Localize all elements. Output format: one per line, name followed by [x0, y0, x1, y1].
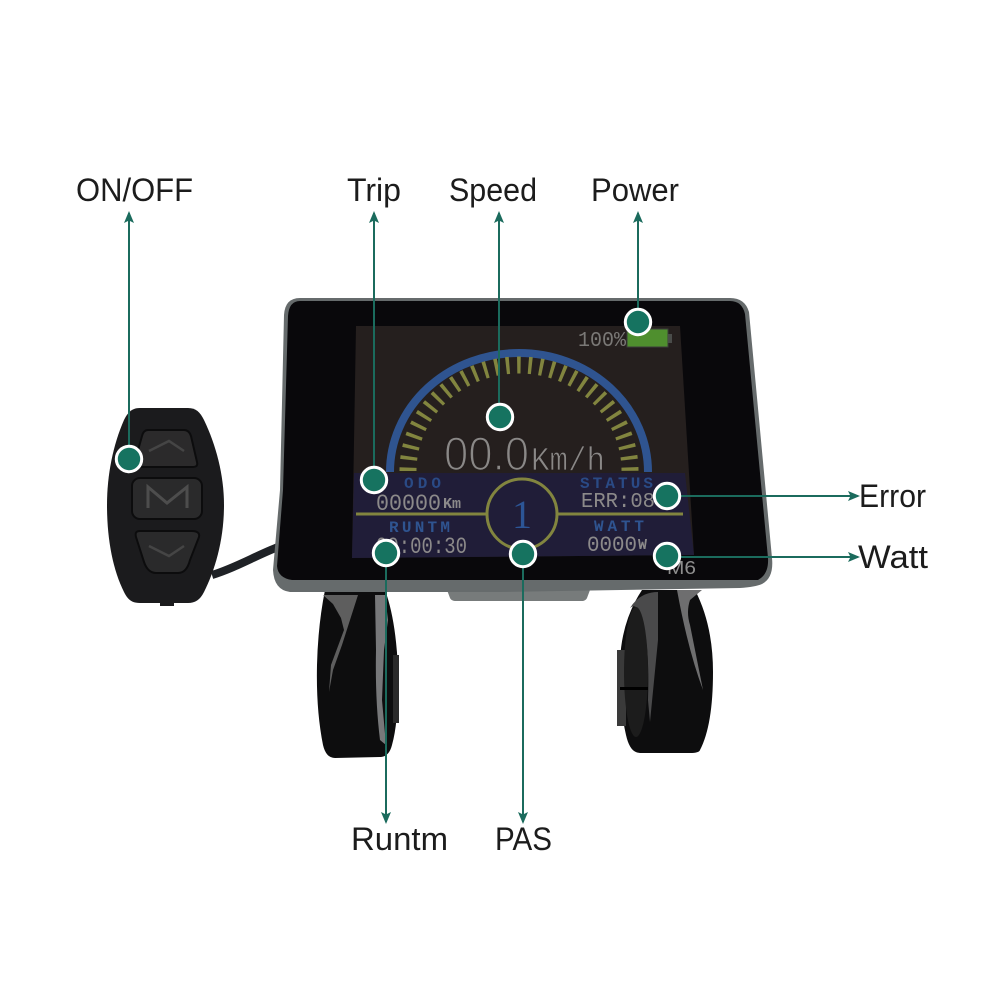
- callout: Power: Power: [591, 172, 679, 208]
- speed gauge: [390, 353, 648, 472]
- bezel rim: [273, 298, 772, 592]
- odometer: [376, 475, 461, 517]
- speed readout: [444, 427, 605, 480]
- PAS level dial: 1: [512, 492, 532, 537]
- callout: Runtm: [351, 540, 448, 857]
- remote control: [107, 408, 278, 606]
- battery indicator: [578, 329, 672, 353]
- up button: [135, 430, 197, 467]
- callout: Speed: [449, 172, 537, 430]
- callout: ON/OFF: [76, 172, 193, 472]
- watt: W: [638, 537, 647, 554]
- battery indicator: 100%: [578, 330, 626, 353]
- watt: 0000: [587, 533, 637, 558]
- status: [580, 475, 655, 514]
- callout: Error: Error: [859, 478, 926, 514]
- runtime: RUNTM: [389, 519, 450, 537]
- right clamp: [617, 590, 713, 753]
- status: STATUS: [580, 475, 653, 493]
- odometer: Km: [443, 496, 461, 513]
- watt: WATT: [594, 518, 644, 536]
- speed readout: Km/h: [531, 443, 605, 480]
- left clamp: [317, 590, 399, 758]
- speed readout: 00.0: [444, 427, 529, 480]
- callout: Error: [654, 478, 926, 514]
- PAS level dial: [356, 479, 683, 549]
- callout: Watt: [654, 539, 928, 575]
- odometer: 00000: [376, 491, 441, 517]
- runtime: [376, 519, 467, 560]
- status: ERR:08: [581, 491, 655, 514]
- cable: [212, 547, 278, 575]
- callout: ON/OFF: ON/OFF: [76, 172, 193, 208]
- device body: [273, 298, 772, 592]
- callout: PAS: PAS: [495, 821, 552, 857]
- down button: [136, 531, 199, 573]
- callout: Runtm: Runtm: [351, 821, 448, 857]
- M button: [132, 478, 202, 519]
- odometer: ODO: [404, 475, 441, 493]
- remote body: [107, 408, 224, 603]
- panel: LCD screen: [352, 326, 694, 560]
- runtime: 00:00:30: [376, 534, 467, 560]
- callout: PAS: [495, 541, 552, 857]
- callout: Trip: [347, 172, 401, 493]
- callout: Watt: Watt: [858, 539, 928, 575]
- callout: Trip: Trip: [347, 172, 401, 208]
- callout: Power: [591, 172, 679, 335]
- black face: [277, 301, 768, 580]
- connector tab: [447, 590, 590, 601]
- model mark: M6: [667, 558, 696, 578]
- callout: Speed: Speed: [449, 172, 537, 208]
- watt: [587, 518, 647, 558]
